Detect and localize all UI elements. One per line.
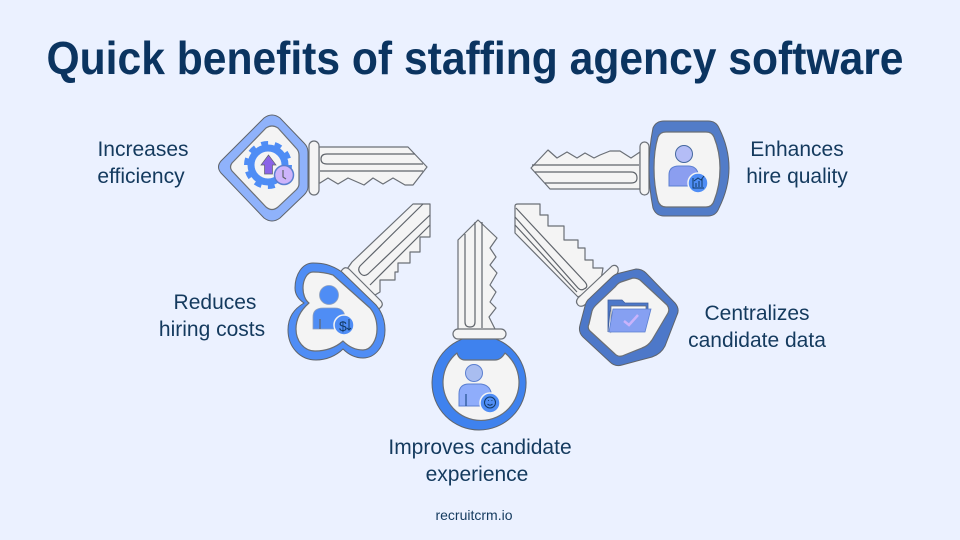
label: enhances hire quality: Enhances <box>750 138 844 161</box>
key blade <box>515 204 603 297</box>
icon: person with smiley <box>459 364 500 413</box>
icon: person with chart <box>669 146 708 193</box>
label: reduces hiring costs: hiring costs <box>159 318 265 341</box>
key blade <box>531 150 640 189</box>
key collar <box>309 141 319 195</box>
key bow <box>579 269 678 366</box>
key bow <box>218 115 308 221</box>
key bow <box>649 121 729 216</box>
icon: person with dollar: $ <box>339 318 347 334</box>
label: increases efficiency: Increases <box>97 138 189 161</box>
key bow <box>288 263 385 360</box>
icon: person with dollar <box>313 286 354 335</box>
key: centralizes candidate data <box>515 204 678 366</box>
footer source: recruitcrm.io <box>435 507 513 523</box>
key: reduces hiring costs <box>288 204 430 360</box>
key collar <box>340 268 382 310</box>
key blade <box>319 147 427 185</box>
icon: gear with upward arrow and clock <box>246 143 294 187</box>
key: enhances hire quality <box>531 121 729 216</box>
key collar <box>576 265 618 306</box>
key: increases efficiency <box>218 115 427 221</box>
key blade <box>458 220 497 335</box>
icon: folder with check <box>608 300 651 332</box>
key blade <box>345 204 430 298</box>
key bow <box>432 336 526 430</box>
label: reduces hiring costs: Reduces <box>174 291 256 314</box>
key: improves candidate experience <box>432 220 526 430</box>
label: centralizes candidate data: Centralizes <box>704 302 810 325</box>
key collar <box>453 329 506 339</box>
label: enhances hire quality: hire quality <box>746 165 848 188</box>
label: improves candidate experience: Improves candidate <box>388 436 572 459</box>
key collar <box>640 142 649 195</box>
label: improves candidate experience: experience <box>426 463 528 486</box>
label: increases efficiency: efficiency <box>97 165 185 188</box>
label: centralizes candidate data: candidate data <box>688 329 826 352</box>
title: Quick benefits of staffing agency software <box>46 32 904 84</box>
